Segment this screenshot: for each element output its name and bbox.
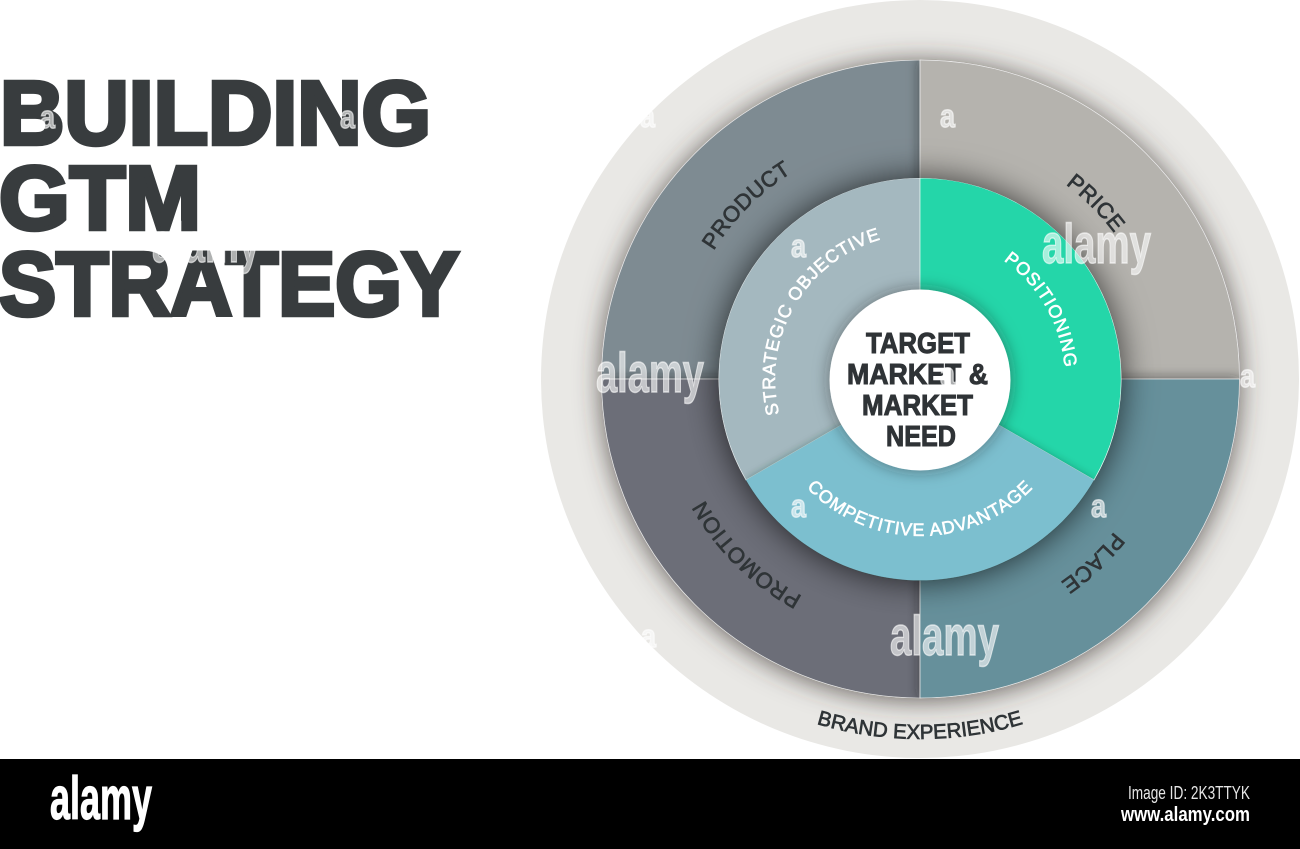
title: STRATEGY bbox=[0, 235, 459, 335]
watermarks: alamy bbox=[596, 341, 704, 404]
footer logo: alamy bbox=[50, 765, 152, 832]
label: product: PRODUCT bbox=[702, 160, 788, 250]
panel: marketing mix quadrants bbox=[602, 60, 1240, 698]
segment: positioning bbox=[920, 178, 1121, 480]
center text bbox=[847, 328, 988, 453]
center text: TARGET bbox=[866, 328, 970, 360]
label: place: PLACE bbox=[1061, 532, 1126, 594]
label: brand experience: BRAND EXPERIENCE bbox=[818, 710, 1023, 740]
title bbox=[0, 64, 459, 335]
center text: MARKET & bbox=[847, 359, 988, 391]
panel: strategy wheel bbox=[541, 0, 1299, 758]
watermarks: a bbox=[340, 99, 355, 135]
title: BUILDING bbox=[0, 64, 431, 164]
label: promotion: PROMOTION bbox=[692, 501, 802, 609]
watermarks: a bbox=[641, 618, 656, 654]
watermarks: a bbox=[791, 228, 806, 264]
segment labels bbox=[762, 228, 1077, 536]
watermarks: a bbox=[940, 98, 955, 134]
watermarks: alamy bbox=[152, 211, 260, 274]
quadrant: price bbox=[920, 60, 1240, 379]
watermarks: a bbox=[1240, 358, 1255, 394]
label: competitive advantage: COMPETITIVE ADVANTAGE bbox=[809, 480, 1033, 536]
quadrant: product bbox=[602, 60, 920, 379]
quadrant: place bbox=[920, 379, 1240, 698]
segment: strategic objective bbox=[719, 178, 920, 480]
watermarks: a bbox=[791, 488, 806, 524]
watermarks: a bbox=[940, 356, 955, 392]
watermarks: a bbox=[640, 98, 655, 134]
quadrant labels bbox=[692, 160, 1126, 609]
footer image id: Image ID: 2K3TTYK bbox=[1128, 783, 1250, 803]
label: strategic objective: STRATEGIC OBJECTIVE bbox=[762, 228, 880, 415]
footer bar bbox=[0, 759, 1300, 849]
watermarks: alamy bbox=[890, 604, 999, 667]
segment: competitive advantage bbox=[744, 422, 1096, 581]
panel: strategy segments bbox=[719, 178, 1121, 580]
label: price: PRICE bbox=[1066, 173, 1126, 233]
watermarks: a bbox=[40, 99, 55, 135]
inner ring shadow bbox=[719, 178, 1121, 580]
center text: MARKET bbox=[862, 390, 973, 422]
center text: NEED bbox=[886, 421, 956, 453]
footer url: www.alamy.com bbox=[1120, 804, 1250, 826]
title: GTM bbox=[0, 149, 201, 249]
watermarks: a bbox=[1091, 488, 1106, 524]
watermarks bbox=[40, 98, 1255, 667]
quadrant: promotion bbox=[602, 379, 920, 698]
center circle bbox=[830, 290, 1010, 470]
label: positioning: POSITIONING bbox=[1004, 251, 1077, 366]
watermarks: alamy bbox=[1042, 212, 1151, 275]
